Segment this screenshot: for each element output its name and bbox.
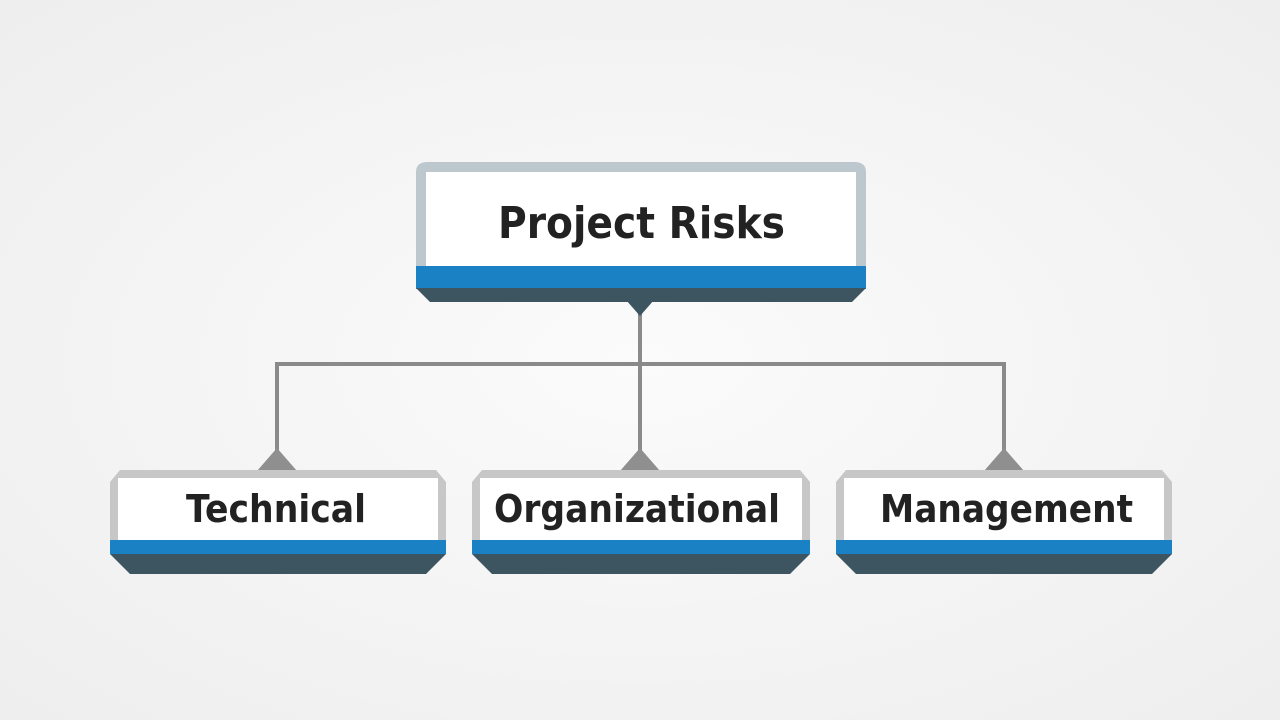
panel: Organizational xyxy=(472,470,810,574)
panel: Organizational: Organizational xyxy=(494,487,780,531)
panel: Management: Management xyxy=(880,487,1133,531)
panel: Technical: Technical xyxy=(186,487,366,531)
connector arrows xyxy=(257,300,1024,471)
panel: Technical xyxy=(110,470,446,574)
panel: Project Risks xyxy=(416,162,866,302)
connector lines xyxy=(277,312,1004,458)
panel: Management xyxy=(836,470,1172,574)
title: Project Risks xyxy=(498,198,785,249)
